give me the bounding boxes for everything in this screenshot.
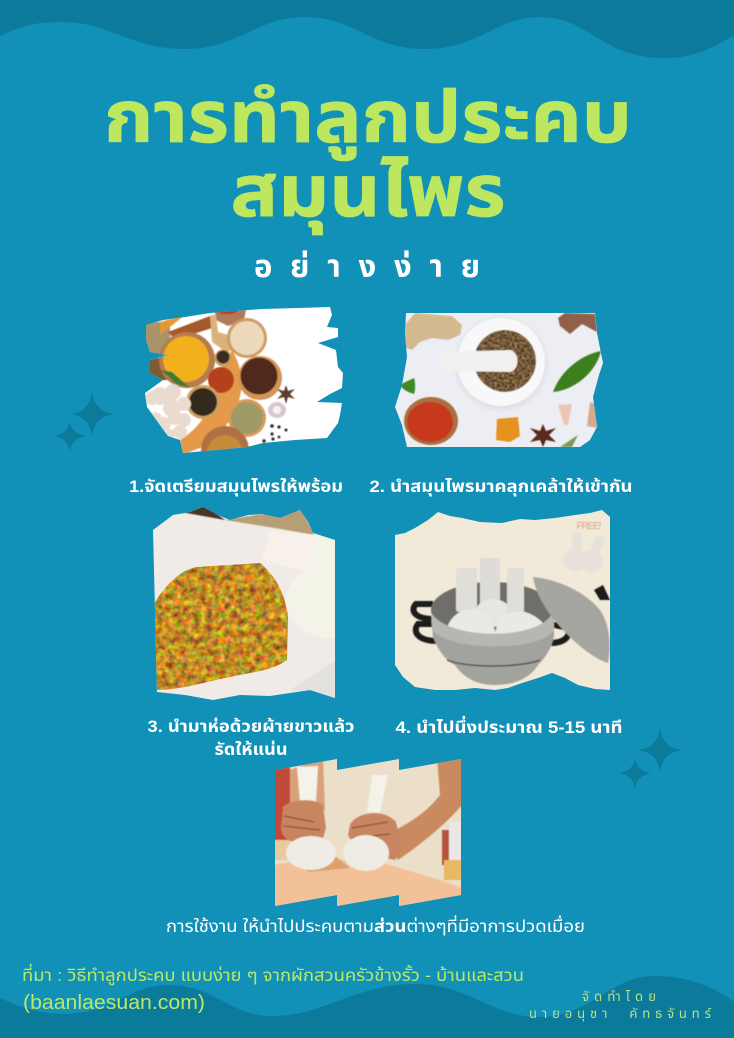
step 1 label: 1.จัดเตรียมสมุนไพรให้พร้อม bbox=[129, 478, 343, 496]
bottom wave bbox=[0, 976, 734, 1038]
title bbox=[104, 78, 632, 235]
pot handles bbox=[413, 604, 569, 643]
source citation: ที่มา : วิธีทำลูกประคบ แบบง่าย ๆ จากผักสวนครัวข้างรั้ว - บ้านและสวน bbox=[22, 963, 524, 987]
step 2 label: 2. นำสมุนไพรมาคลุกเคล้าให้เข้ากัน bbox=[370, 478, 632, 496]
subtitle: อย่างง่าย bbox=[254, 249, 480, 284]
pot interior bbox=[430, 582, 551, 632]
lid bbox=[533, 577, 610, 663]
icon: sparkle stars right bbox=[619, 728, 682, 790]
credit: จัดทำโดย bbox=[582, 989, 656, 1004]
photo: mortar and pestle bbox=[393, 310, 605, 450]
pot body bbox=[432, 618, 555, 686]
photo: herbal balls in steamer bbox=[390, 508, 614, 696]
step 3 label: รัดให้แน่น bbox=[214, 741, 288, 759]
photo: spices bbox=[145, 307, 343, 453]
step 4 label: 4. นำไปนึ่งประมาณ 5-15 นาที bbox=[396, 715, 622, 737]
source citation bbox=[22, 963, 524, 1014]
step 3 label: 3. นำมาห่อด้วยผ้ายขาวแล้ว bbox=[148, 718, 354, 736]
credit: นายอนุชา คัทธจันทร์ bbox=[529, 1006, 712, 1021]
credit bbox=[529, 989, 712, 1021]
top wave bbox=[0, 0, 734, 58]
photo: massage with herbal balls bbox=[272, 755, 464, 910]
pot front rim bbox=[431, 612, 554, 646]
herbal balls bbox=[480, 558, 500, 608]
title: การทำลูกประคบ bbox=[104, 78, 632, 161]
usage note: การใช้งาน ให้นำไปประคบตาม ส่วนต่างๆที่มีอาการปวดเมื่อย bbox=[166, 915, 585, 936]
text: free label: FREE! bbox=[576, 521, 602, 532]
title: สมุนไพร bbox=[230, 152, 506, 235]
step 3 label bbox=[148, 718, 354, 759]
icon: sparkle stars left bbox=[54, 392, 113, 452]
source citation: (baanlaesuan.com) bbox=[23, 992, 205, 1014]
photo: herbs on white cloth bbox=[150, 505, 338, 702]
